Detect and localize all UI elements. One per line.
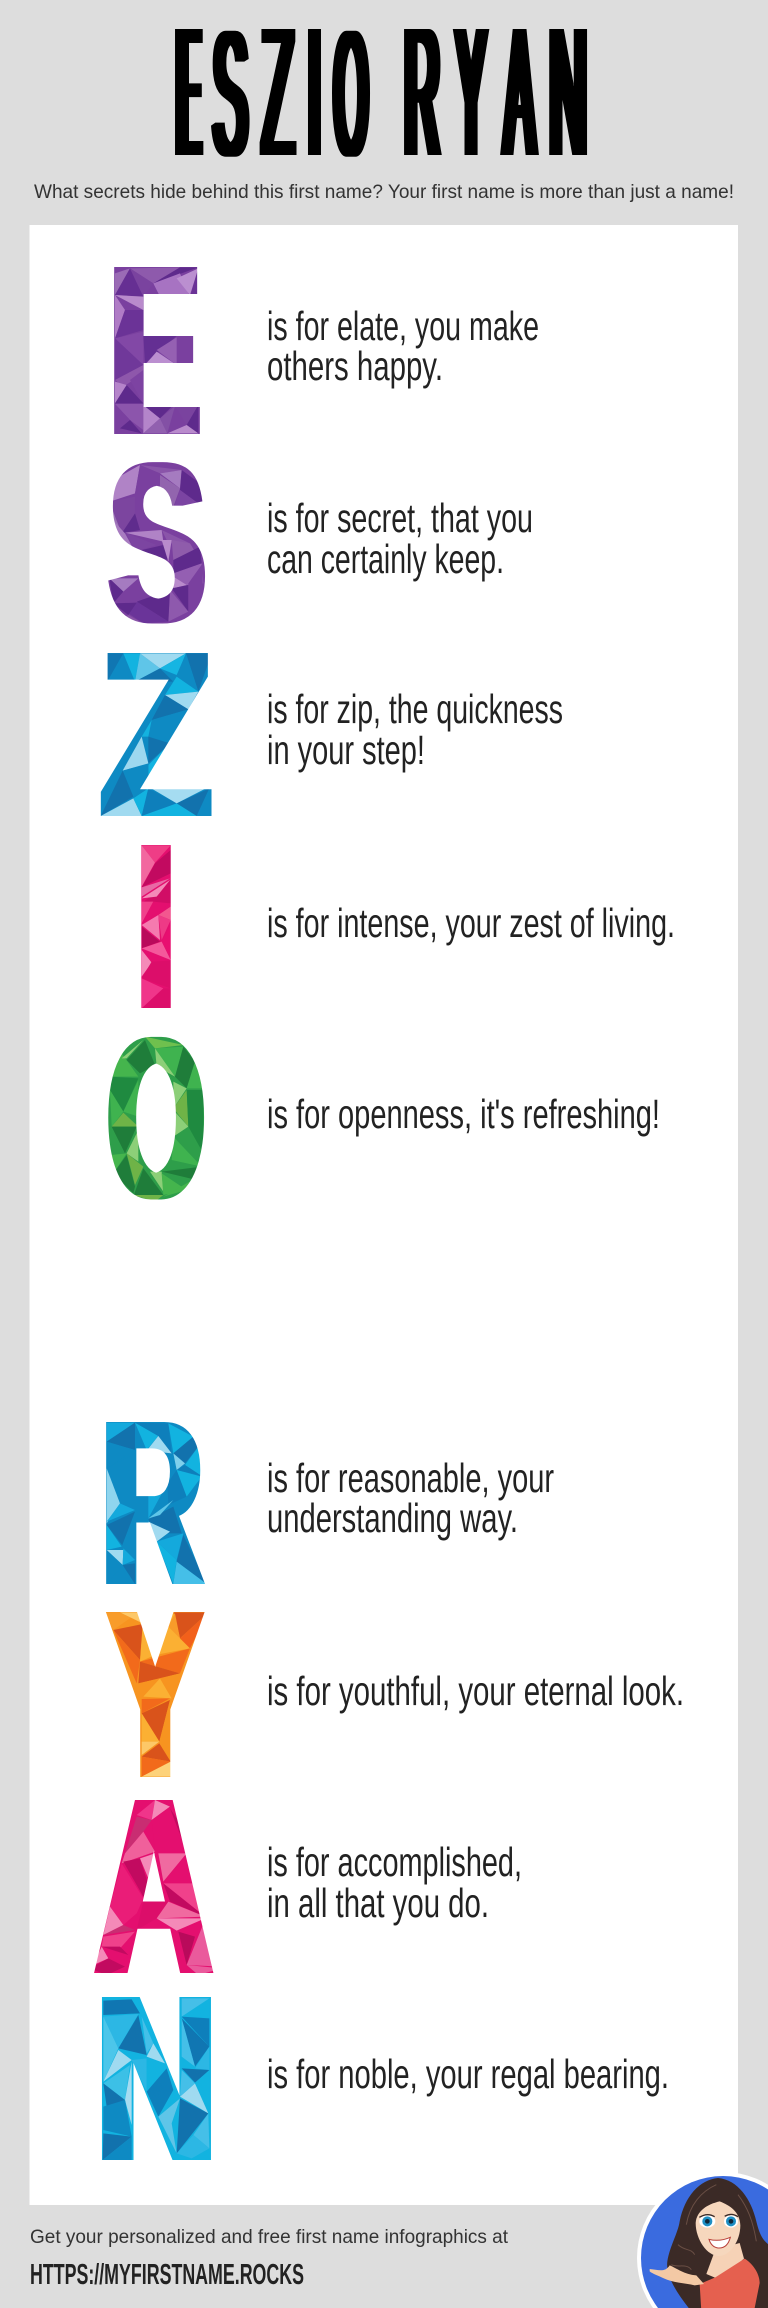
icon: avatar bbox=[637, 2172, 768, 2308]
panel: letters bbox=[30, 225, 738, 2205]
icon: low-poly letter E bbox=[114, 267, 200, 434]
text: E: is for elate, you make bbox=[267, 303, 539, 349]
icon: low-poly letter R bbox=[106, 1422, 205, 1584]
icon: low-poly letter O bbox=[105, 1033, 207, 1205]
icon: low-poly letter Y bbox=[106, 1612, 205, 1777]
title: O bbox=[334, 0, 368, 194]
text: Z: in your step! bbox=[267, 727, 425, 773]
text: Z: is for zip, the quickness bbox=[267, 686, 563, 732]
text: R bbox=[267, 1455, 554, 1541]
icon: low-poly letter I bbox=[141, 845, 171, 1008]
footer url: HTTPS://MYFIRSTNAME.ROCKS bbox=[30, 2259, 304, 2291]
text: S bbox=[267, 495, 533, 582]
text: A: is for accomplished, bbox=[267, 1839, 522, 1885]
text: Z bbox=[267, 686, 563, 773]
text: A bbox=[267, 1839, 522, 1926]
subtitle: What secrets hide behind this first name? Your first name is more than just a name! bbox=[34, 181, 734, 203]
icon: low-poly letter Z bbox=[100, 653, 212, 816]
icon: low-poly letter N bbox=[98, 1995, 213, 2163]
text: R: understanding way. bbox=[267, 1495, 518, 1541]
text: E: others happy. bbox=[267, 343, 443, 389]
text: S: can certainly keep. bbox=[267, 536, 504, 582]
text: S: is for secret, that you bbox=[267, 495, 533, 541]
text: R: is for reasonable, your bbox=[267, 1455, 554, 1501]
text: E bbox=[267, 303, 539, 389]
icon: low-poly letter S bbox=[108, 462, 206, 624]
footer text: Get your personalized and free first name infographics at bbox=[30, 2226, 509, 2248]
icon: low-poly letter A bbox=[94, 1800, 214, 1973]
title bbox=[178, 0, 587, 195]
text: A: in all that you do. bbox=[267, 1880, 489, 1926]
